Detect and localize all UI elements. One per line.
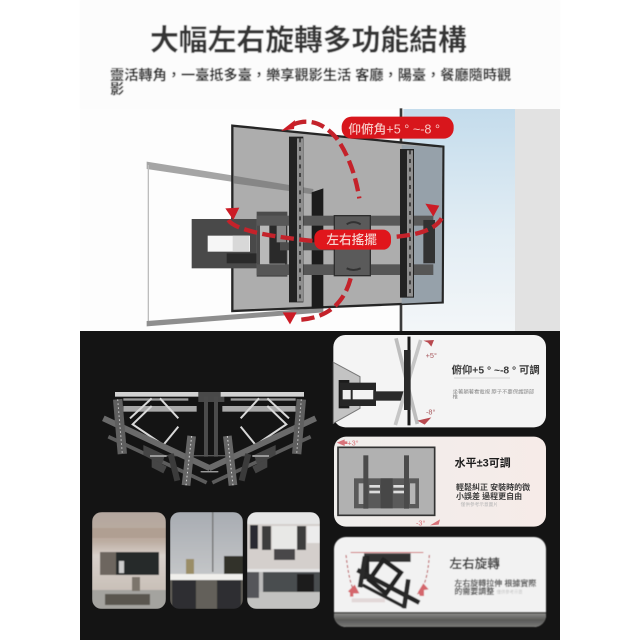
mount wall plate and arm	[192, 212, 435, 277]
callout: left-right swing: 左右搖擺	[326, 232, 377, 247]
card description: 坐著躺著看電視 脖子不要保護頸部	[453, 387, 535, 395]
callout: tilt angle	[342, 117, 454, 139]
panel: left-right rotation card	[334, 537, 546, 627]
icon: ±3 arrows	[337, 438, 440, 527]
red dashed rotation arrows	[228, 122, 442, 320]
photo: kitchen	[247, 512, 320, 609]
icon: wall side with arm	[333, 362, 404, 423]
panel: horizontal adjustment card: 僅供參考示意圖片	[461, 501, 498, 508]
arrowheads	[225, 120, 439, 324]
subtitle text: 影	[110, 81, 124, 98]
window frame pole	[400, 108, 402, 331]
icon: tilted screens	[395, 337, 421, 425]
subtitle text: 靈活轉角，一臺抵多臺，樂享觀影生活 客廳，陽臺，餐廳隨時觀	[110, 67, 511, 84]
card heading: 俯仰+5 ° ~-8 ° 可調	[452, 364, 540, 377]
television screen	[232, 126, 443, 311]
icon: tilt arrows: +5°	[426, 351, 437, 360]
subtitle text	[110, 67, 511, 98]
left vertical rail	[289, 137, 303, 302]
black column behind mount	[312, 188, 323, 308]
photo: dining room	[170, 512, 243, 609]
card description	[456, 482, 530, 501]
photo: living room	[92, 512, 166, 609]
card description	[453, 387, 535, 401]
card description: 輕鬆糾正 安裝時的微	[456, 482, 530, 492]
title: 大幅左右旋轉多功能結構	[150, 25, 467, 57]
icon: ±3 arrows: +3°	[347, 438, 359, 447]
right vertical rail	[400, 149, 414, 298]
card heading: 水平±3可調	[455, 456, 511, 470]
panel: horizontal adjustment card	[334, 437, 546, 527]
callout: left-right swing	[314, 230, 391, 250]
panel: left-right rotation card: 僅供參考示意	[497, 588, 523, 595]
card description: 的需要調整	[454, 586, 494, 596]
callout: tilt angle: 仰俯角+5 ° ~-8 °	[348, 122, 440, 137]
panel: main TV mount illustration	[80, 108, 560, 331]
card heading: 左右旋轉	[449, 556, 500, 571]
wall outline	[147, 162, 323, 326]
panel: tilt adjustment card	[333, 335, 546, 427]
panel: dark lower section	[80, 331, 560, 640]
card description	[454, 578, 536, 596]
icon: tilt arrows	[417, 340, 437, 425]
center VESA plate	[334, 216, 370, 276]
window sky background	[403, 109, 517, 331]
chart: rotation range of mount arms	[103, 392, 316, 485]
card description: 小誤差 過程更自由	[456, 491, 522, 501]
icon: level-adjusted screen with mount	[338, 447, 435, 515]
card description: 左右旋轉拉伸 根據實際	[454, 578, 536, 588]
icon: rotating arm top view	[346, 552, 429, 608]
icon: tilt arrows: -8°	[426, 407, 436, 416]
header area	[80, 0, 560, 109]
icon: ±3 arrows: -3°	[416, 518, 426, 527]
card description: 椎	[453, 393, 459, 401]
